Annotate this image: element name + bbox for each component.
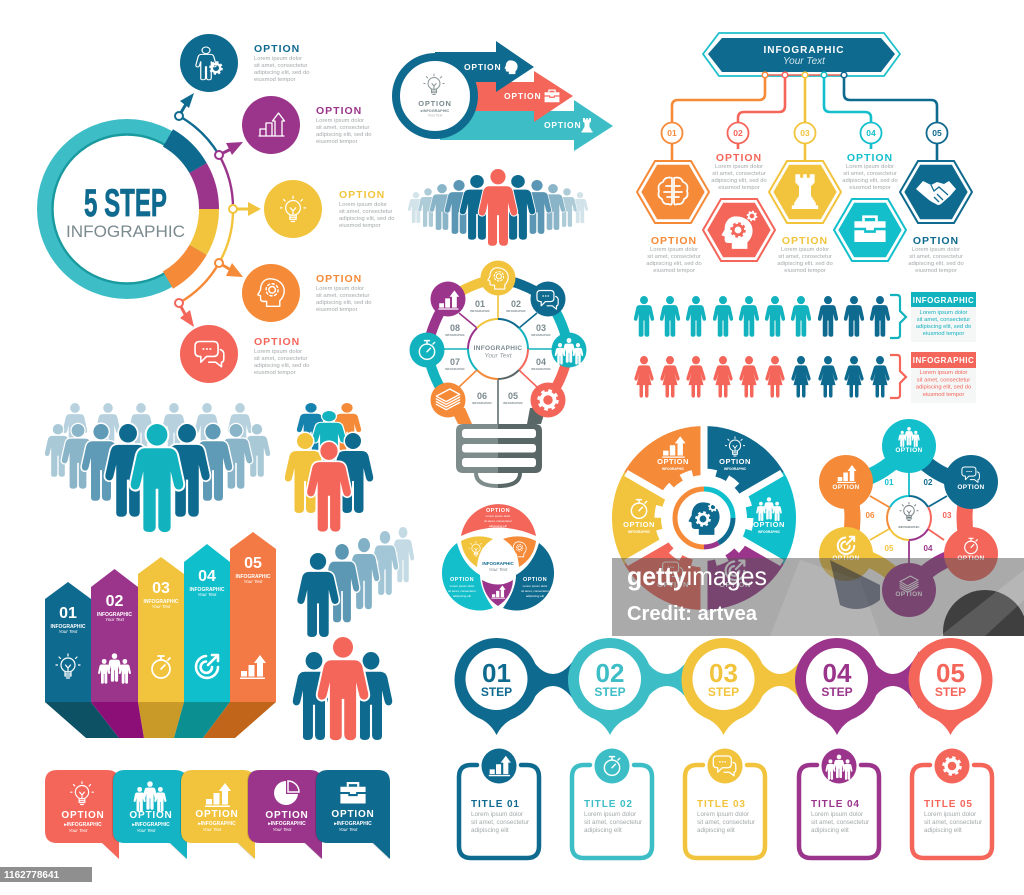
venn text: adipiscing elit: [526, 594, 544, 598]
card 04: [799, 748, 879, 858]
spokes: [870, 472, 947, 565]
option 5: eiusmod tempor: [254, 370, 296, 376]
hexagon labels: Lorem ipsum dolor: [912, 247, 960, 253]
column 02: [91, 569, 138, 702]
number badges: 03: [800, 128, 810, 138]
option 3: OPTION: [339, 189, 385, 201]
sector labels: INFOGRAPHIC: [628, 530, 651, 534]
venn icons: [469, 542, 526, 599]
bulb numbers: INFOGRAPHIC: [531, 367, 551, 371]
hexagon labels: eiusmod tempor: [653, 268, 695, 274]
arrow labels: OPTION: [464, 62, 501, 72]
pictogram row: women: eiusmod tempor: [923, 392, 964, 398]
hexagon labels: eiusmod tempor: [784, 268, 826, 274]
column 03: Your Text: [152, 604, 171, 609]
option 5: adipiscing elit, sed do: [254, 363, 309, 369]
number badges: [662, 122, 948, 144]
bulb numbers: INFOGRAPHIC: [503, 401, 523, 405]
watermark band: [612, 558, 1024, 636]
bubble 2: Your Text: [137, 828, 156, 833]
center ring: [468, 319, 528, 379]
pictogram row: men: [634, 292, 976, 342]
sector labels: [623, 436, 785, 589]
ring hub: Your Text: [428, 114, 442, 118]
venn text: sit amet, consectetur: [521, 589, 549, 593]
venn text: Your Text: [489, 567, 508, 572]
card 01: adipiscing elit: [471, 827, 509, 834]
card 02: adipiscing elit: [584, 827, 622, 834]
panel: gear wheel: [612, 420, 796, 616]
option 5: [180, 325, 309, 383]
card 05: sit amet, consectetur: [924, 819, 982, 826]
hexagon labels: sit amet, consectetur: [712, 171, 766, 177]
step pin 01: STEP: [481, 685, 512, 699]
step pin 02: [568, 638, 652, 735]
option 3: Lorem ipsum dolor: [339, 202, 387, 208]
venn text: OPTION: [523, 577, 547, 583]
option 1: eiusmod tempor: [254, 77, 296, 83]
bubble 2: [112, 770, 187, 859]
hexagon 5 handshake: [900, 161, 972, 223]
column 04: Your Text: [198, 592, 217, 597]
arrow labels: [464, 60, 592, 132]
bubble 3: [180, 770, 255, 859]
connectors: [672, 72, 937, 160]
hexagon labels: eiusmod tempor: [718, 185, 760, 191]
hexagon 2 head: [703, 199, 775, 261]
network bands: [846, 446, 971, 590]
hexagon labels: OPTION: [847, 152, 893, 164]
step pin 01: [454, 638, 538, 735]
hexagon labels: sit amet, consectetur: [778, 254, 832, 260]
pictogram row: men: adipiscing elit, sed do: [916, 324, 971, 330]
yellow petal: [461, 536, 493, 567]
option 2: Lorem ipsum dolor: [316, 118, 364, 124]
header banner: INFOGRAPHIC: [764, 45, 844, 56]
folded base: [45, 702, 276, 738]
bubble 4: [247, 770, 322, 859]
hexagon labels: Lorem ipsum dolor: [846, 164, 894, 170]
column 03: 03: [152, 580, 170, 597]
sector labels: OPTION: [657, 457, 689, 466]
bulb numbers: INFOGRAPHIC: [445, 333, 465, 337]
hexagon labels: sit amet, consectetur: [909, 254, 963, 260]
panel: title cards: [459, 748, 992, 858]
option 1: sit amet, consectetur: [254, 63, 308, 69]
network numbers: 01: [885, 478, 894, 487]
hub: [887, 496, 931, 540]
card 03: [685, 748, 765, 858]
center label: [474, 345, 522, 360]
venn text: [448, 508, 549, 598]
panel: three arrows: [396, 41, 613, 151]
card 05: adipiscing elit: [924, 827, 962, 834]
panel: light bulb infographic: [410, 260, 586, 486]
bulb numbers: 08: [450, 323, 460, 333]
card 01: sit amet, consectetur: [471, 819, 529, 826]
sector labels: INFOGRAPHIC: [758, 530, 781, 534]
blue arrow: [435, 41, 534, 92]
pictogram row: women: [634, 352, 976, 403]
venn text: sit amet, consectetur: [448, 589, 476, 593]
card 04: TITLE 04: [811, 799, 860, 810]
card 02: [572, 748, 652, 858]
option 1: [180, 34, 309, 92]
step pin 04: 04: [823, 658, 852, 688]
bubble 5: [315, 770, 390, 859]
network nodes: [819, 419, 998, 617]
card 03: sit amet, consectetur: [697, 819, 755, 826]
hexagon labels: OPTION: [913, 235, 959, 247]
people trio: [293, 637, 392, 740]
pictogram row: women: sit amet, consectetur: [917, 378, 970, 384]
blue lobe: [503, 543, 554, 611]
step pin 05: 05: [936, 658, 965, 688]
teal arrow: [440, 100, 613, 151]
column 04: [184, 544, 230, 702]
option 1: OPTION: [254, 43, 300, 55]
venn text: OPTION: [450, 577, 474, 583]
column 04: INFOGRAPHIC: [190, 587, 225, 593]
arrow labels: OPTION: [544, 120, 581, 130]
option 4: OPTION: [316, 273, 362, 285]
column 04: 04: [198, 568, 216, 585]
pictogram row: men: sit amet, consectetur: [917, 317, 970, 323]
venn text: adipiscing elit: [453, 594, 471, 598]
network numbers: [866, 478, 952, 553]
panel: arrow columns: [45, 532, 276, 738]
bubble 4: OPTION: [265, 810, 309, 821]
column 03: [138, 557, 184, 702]
orange petal: [503, 536, 536, 567]
panel: people crowd left: [45, 403, 270, 532]
bulb numbers: INFOGRAPHIC: [531, 333, 551, 337]
option 3: eiusmod tempor: [339, 223, 381, 229]
step pin 03: STEP: [708, 685, 739, 699]
venn text: Lorem ipsum dolor: [450, 584, 474, 588]
sector labels: INFOGRAPHIC: [724, 467, 747, 471]
venn text: Lorem ipsum dolor: [523, 584, 547, 588]
option 4: [242, 264, 371, 322]
center label: Your Text: [484, 352, 513, 360]
bubble 5: OPTION: [331, 809, 375, 820]
column 02: INFOGRAPHIC: [97, 612, 132, 618]
step pin 02: STEP: [594, 685, 626, 699]
bubble 4: ▸INFOGRAPHIC: [267, 821, 306, 827]
network numbers: 04: [924, 544, 933, 553]
network numbers: 06: [866, 511, 875, 520]
crowd top center: [408, 169, 588, 246]
option 1: adipiscing elit, sed do: [254, 70, 309, 76]
bulb base: [450, 408, 546, 486]
bulb numbers: INFOGRAPHIC: [506, 309, 526, 313]
number badges: 04: [866, 128, 876, 138]
network numbers: 03: [943, 511, 952, 520]
header banner: Your Text: [783, 56, 826, 67]
bulb numbers: INFOGRAPHIC: [472, 401, 492, 405]
sectors: [612, 420, 796, 616]
bubble 1: ▸INFOGRAPHIC: [63, 822, 102, 828]
bubble 5: ▸INFOGRAPHIC: [333, 821, 372, 827]
option 5: sit amet, consectetur: [254, 356, 308, 362]
ring hub: [396, 57, 474, 135]
network numbers: 02: [924, 478, 933, 487]
bubble 3: OPTION: [195, 809, 239, 820]
card 02: Lorem ipsum dolor: [584, 811, 636, 818]
panel: steps chain: [454, 638, 992, 735]
node circles: [410, 260, 586, 418]
step pin 03: 03: [709, 658, 738, 688]
hexagon 4 briefcase: [834, 199, 906, 261]
bulb numbers: 07: [450, 357, 460, 367]
sector labels: OPTION: [753, 520, 785, 529]
card 05: [912, 748, 992, 858]
number badges: 01: [667, 128, 677, 138]
network nodes: OPTION: [957, 555, 985, 562]
ring: [45, 127, 219, 291]
column 02: 02: [106, 593, 124, 610]
venn text: sit amet, consectetur: [484, 519, 512, 523]
bulb numbers: 06: [477, 391, 487, 401]
pictogram row: women: adipiscing elit, sed do: [916, 384, 971, 390]
option 5: Lorem ipsum dolor: [254, 349, 302, 355]
spokes: [441, 295, 555, 424]
bubble 2: ▸INFOGRAPHIC: [131, 822, 170, 828]
bubble 3: ▸INFOGRAPHIC: [197, 821, 236, 827]
option 3: adipiscing elit, sed do: [339, 216, 394, 222]
venn text: Lorem ipsum dolor: [486, 514, 510, 518]
option 4: sit amet, consectetur: [316, 293, 370, 299]
step pin 05: [908, 638, 992, 735]
hexagon labels: adipiscing elit, sed do: [646, 261, 702, 267]
ring hub: OPTION: [418, 99, 452, 108]
bubble 4: Your Text: [273, 827, 292, 832]
hexagon labels: adipiscing elit, sed do: [908, 261, 964, 267]
pictogram row: men: Lorem ipsum dolor: [919, 310, 968, 316]
sector labels: INFOGRAPHIC: [662, 467, 685, 471]
card 03: TITLE 03: [697, 799, 746, 810]
bulb numbers: INFOGRAPHIC: [470, 309, 490, 313]
watermark band: Credit: artvea: [627, 603, 758, 625]
hexagon 3 rook: [769, 161, 841, 223]
card 03: adipiscing elit: [697, 827, 735, 834]
bulb numbers: [445, 299, 551, 405]
card 05: Lorem ipsum dolor: [924, 811, 976, 818]
option 3: sit amet, consectetur: [339, 209, 393, 215]
pictogram row: women: Lorem ipsum dolor: [919, 370, 968, 376]
step pin 01: 01: [482, 658, 511, 688]
people queue: [297, 527, 414, 637]
pictogram row: men: eiusmod tempor: [923, 331, 964, 337]
network nodes: OPTION: [832, 484, 860, 491]
column 05: [230, 532, 276, 702]
network nodes: OPTION: [895, 447, 923, 454]
bands: [427, 278, 569, 400]
network nodes: OPTION: [895, 591, 923, 598]
option 4: adipiscing elit, sed do: [316, 300, 371, 306]
sector labels: OPTION: [623, 520, 655, 529]
number badges: 05: [932, 128, 942, 138]
network nodes: OPTION: [957, 484, 985, 491]
chain connectors: [527, 651, 919, 709]
panel: colourful team: [285, 403, 373, 532]
panel: speech bubbles: [45, 770, 390, 859]
arrow labels: OPTION: [504, 91, 541, 101]
venn text: OPTION: [486, 508, 510, 514]
option 4: Lorem ipsum dolor: [316, 286, 364, 292]
center label: INFOGRAPHIC: [474, 345, 522, 352]
panel: hexagonal network: [819, 419, 998, 617]
hexagon labels: OPTION: [716, 152, 762, 164]
bubble 2: OPTION: [129, 810, 173, 821]
card 04: adipiscing elit: [811, 827, 849, 834]
bulb numbers: 02: [511, 299, 521, 309]
sector labels: OPTION: [657, 580, 689, 589]
watermark band: gettyimages: [627, 561, 767, 591]
image id tag: 1162778641: [4, 870, 60, 881]
column 02: Your Text: [105, 617, 125, 622]
subtitle: INFOGRAPHIC: [66, 222, 185, 241]
panel: hexagon organisation chart: [637, 33, 972, 274]
option 2: adipiscing elit, sed do: [316, 132, 371, 138]
bubble 1: Your Text: [69, 828, 88, 833]
option 2: sit amet, consectetur: [316, 125, 370, 131]
hexagon labels: sit amet, consectetur: [843, 171, 897, 177]
column 01: Your Text: [59, 629, 78, 634]
card 04: Lorem ipsum dolor: [811, 811, 863, 818]
step pin 05: STEP: [935, 685, 966, 699]
hexagon labels: [646, 152, 964, 274]
card 04: sit amet, consectetur: [811, 819, 869, 826]
bulb numbers: 01: [475, 299, 485, 309]
bulb numbers: INFOGRAPHIC: [445, 367, 465, 371]
connector arcs and arrows: [175, 93, 261, 327]
sector labels: OPTION: [719, 457, 751, 466]
hexagon labels: eiusmod tempor: [849, 185, 891, 191]
step pin 04: [795, 638, 879, 735]
panel: 5 step infographic: [45, 34, 394, 383]
number badges: 02: [733, 128, 743, 138]
step pin 02: 02: [596, 658, 624, 688]
card 05: TITLE 05: [924, 799, 973, 810]
purple petal: [482, 580, 513, 606]
bubble 1: [45, 770, 119, 859]
red lobe: [461, 504, 536, 536]
card 03: Lorem ipsum dolor: [697, 811, 749, 818]
option 2: eiusmod tempor: [316, 139, 358, 145]
panel: venn diagram: [442, 504, 554, 611]
hexagon labels: eiusmod tempor: [915, 268, 957, 274]
red arrow: [470, 71, 573, 122]
column 05: Your Text: [244, 579, 263, 584]
bubble 3: Your Text: [203, 827, 222, 832]
network nodes: OPTION: [832, 555, 860, 562]
step pin 04: STEP: [821, 685, 853, 699]
hexagon labels: Lorem ipsum dolor: [715, 164, 763, 170]
option 3: [264, 180, 394, 238]
ring hub: ▸INFOGRAPHIC: [420, 109, 449, 113]
card 01: TITLE 01: [471, 799, 520, 810]
step pin 03: [682, 638, 766, 735]
venn text: INFOGRAPHIC: [482, 561, 515, 566]
column 05: 05: [244, 555, 262, 572]
hub: INFOGRAPHIC: [898, 525, 920, 529]
option 4: eiusmod tempor: [316, 307, 358, 313]
option 2: OPTION: [316, 105, 362, 117]
option 5: OPTION: [254, 336, 300, 348]
image id tag: [0, 867, 92, 882]
hexagon labels: sit amet, consectetur: [647, 254, 701, 260]
hexagon labels: adipiscing elit, sed do: [711, 178, 767, 184]
card 01: [459, 748, 539, 858]
hexagon labels: Lorem ipsum dolor: [781, 247, 829, 253]
hexagon labels: adipiscing elit, sed do: [842, 178, 898, 184]
bubble 1: OPTION: [61, 810, 105, 821]
column 03: INFOGRAPHIC: [144, 599, 179, 605]
column 01: INFOGRAPHIC: [50, 624, 86, 630]
option 1: Lorem ipsum dolor: [254, 56, 302, 62]
bulb numbers: 03: [536, 323, 546, 333]
pictogram row: women: INFOGRAPHIC: [913, 356, 974, 365]
gear hub: [658, 472, 750, 564]
sector labels: OPTION: [719, 580, 751, 589]
hexagon labels: adipiscing elit, sed do: [777, 261, 833, 267]
card 02: sit amet, consectetur: [584, 819, 642, 826]
pictogram row: men: INFOGRAPHIC: [913, 296, 974, 305]
bulb numbers: 04: [536, 357, 546, 367]
teal lobe: [442, 543, 493, 611]
hexagon labels: Lorem ipsum dolor: [650, 247, 698, 253]
venn text: adipiscing elit: [489, 524, 507, 528]
bubble 5: Your Text: [339, 827, 358, 832]
hexagon labels: OPTION: [782, 235, 828, 247]
bulb numbers: 05: [508, 391, 518, 401]
network numbers: 05: [885, 544, 894, 553]
hexagon labels: OPTION: [651, 235, 697, 247]
column 05: INFOGRAPHIC: [236, 574, 271, 580]
hexagon 1 brain: [637, 161, 709, 223]
column 01: [45, 582, 91, 702]
card 01: Lorem ipsum dolor: [471, 811, 523, 818]
header banner: [703, 33, 900, 76]
card 02: TITLE 02: [584, 799, 633, 810]
option 2: [242, 96, 371, 154]
title: 5 step: 5 STEP: [84, 182, 167, 225]
column 01: 01: [59, 605, 77, 622]
